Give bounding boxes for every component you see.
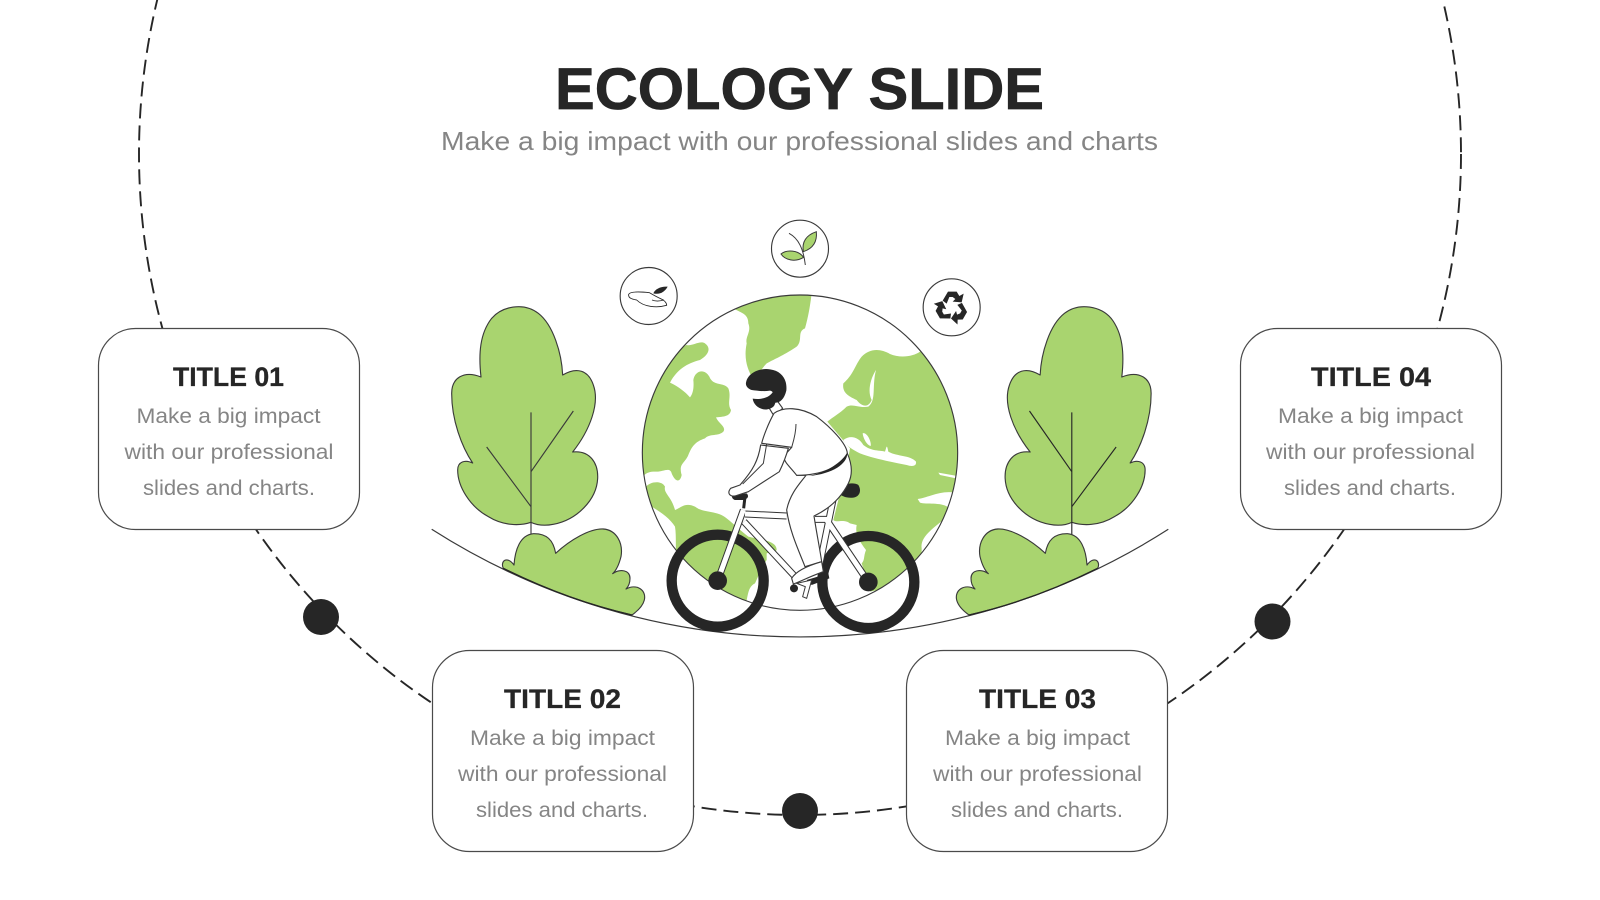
body text: title 01: with our professional	[123, 441, 334, 464]
tree: right	[1005, 307, 1151, 535]
illustration: globe and cyclist	[620, 220, 987, 633]
neck	[769, 400, 783, 416]
tree: left	[452, 307, 598, 535]
body text: title 03: slides and charts.	[951, 799, 1123, 822]
body text: title 02: Make a big impact	[470, 727, 655, 750]
body text: title 04: Make a big impact	[1278, 405, 1463, 428]
timeline dot 3	[1254, 604, 1290, 640]
wheel: rear	[672, 535, 764, 627]
body text: title 01: Make a big impact	[136, 405, 321, 428]
bush: left	[502, 529, 645, 615]
bicycle	[672, 483, 914, 628]
panel: title 02	[432, 650, 694, 852]
body text: title 04: with our professional	[1265, 441, 1475, 464]
subtitle: Make a big impact with our professional slides and charts	[441, 126, 1158, 156]
body text: title 02	[457, 727, 667, 822]
title: ECOLOGY SLIDE	[555, 57, 1044, 122]
hubs	[708, 571, 727, 590]
panel: title 04	[1240, 328, 1502, 530]
body text: title 02: with our professional	[457, 763, 667, 786]
body text: title 01: slides and charts.	[143, 477, 315, 500]
legs	[787, 453, 851, 567]
icon: recycle	[923, 279, 980, 336]
body text: title 02: slides and charts.	[476, 799, 648, 822]
crank and pedal	[790, 584, 798, 592]
heading: title 04: TITLE 04	[1311, 362, 1431, 392]
bush: right	[956, 529, 1099, 615]
panel: title 03	[906, 650, 1168, 852]
face	[752, 388, 775, 400]
shoe	[792, 562, 823, 584]
handlebar grip	[732, 493, 748, 500]
heading: title 03: TITLE 03	[979, 684, 1096, 714]
heading: title 01: TITLE 01	[173, 362, 284, 392]
body text: title 03	[932, 727, 1142, 822]
body text: title 01	[123, 405, 334, 500]
timeline dot 1	[303, 599, 339, 635]
globe	[642, 294, 958, 611]
body text: title 04: slides and charts.	[1284, 477, 1456, 500]
icon: hand holding leaf	[620, 267, 677, 324]
saddle	[837, 483, 860, 498]
dashed orbit ring	[139, 0, 1461, 815]
cyclist	[729, 369, 851, 584]
arm	[729, 445, 788, 496]
beard	[753, 391, 775, 410]
hair	[746, 369, 786, 403]
body text: title 03: with our professional	[932, 763, 1142, 786]
frame	[718, 497, 868, 582]
body text: title 03: Make a big impact	[945, 727, 1130, 750]
shirt	[762, 409, 847, 475]
belt	[808, 453, 847, 476]
wheel: front	[822, 536, 914, 628]
panel: title 01	[98, 328, 360, 530]
ground curve	[432, 529, 1168, 637]
heading: title 02: TITLE 02	[504, 684, 621, 714]
timeline dot 2	[782, 793, 818, 829]
body text: title 04	[1265, 405, 1475, 500]
icon: sprout	[771, 220, 828, 277]
